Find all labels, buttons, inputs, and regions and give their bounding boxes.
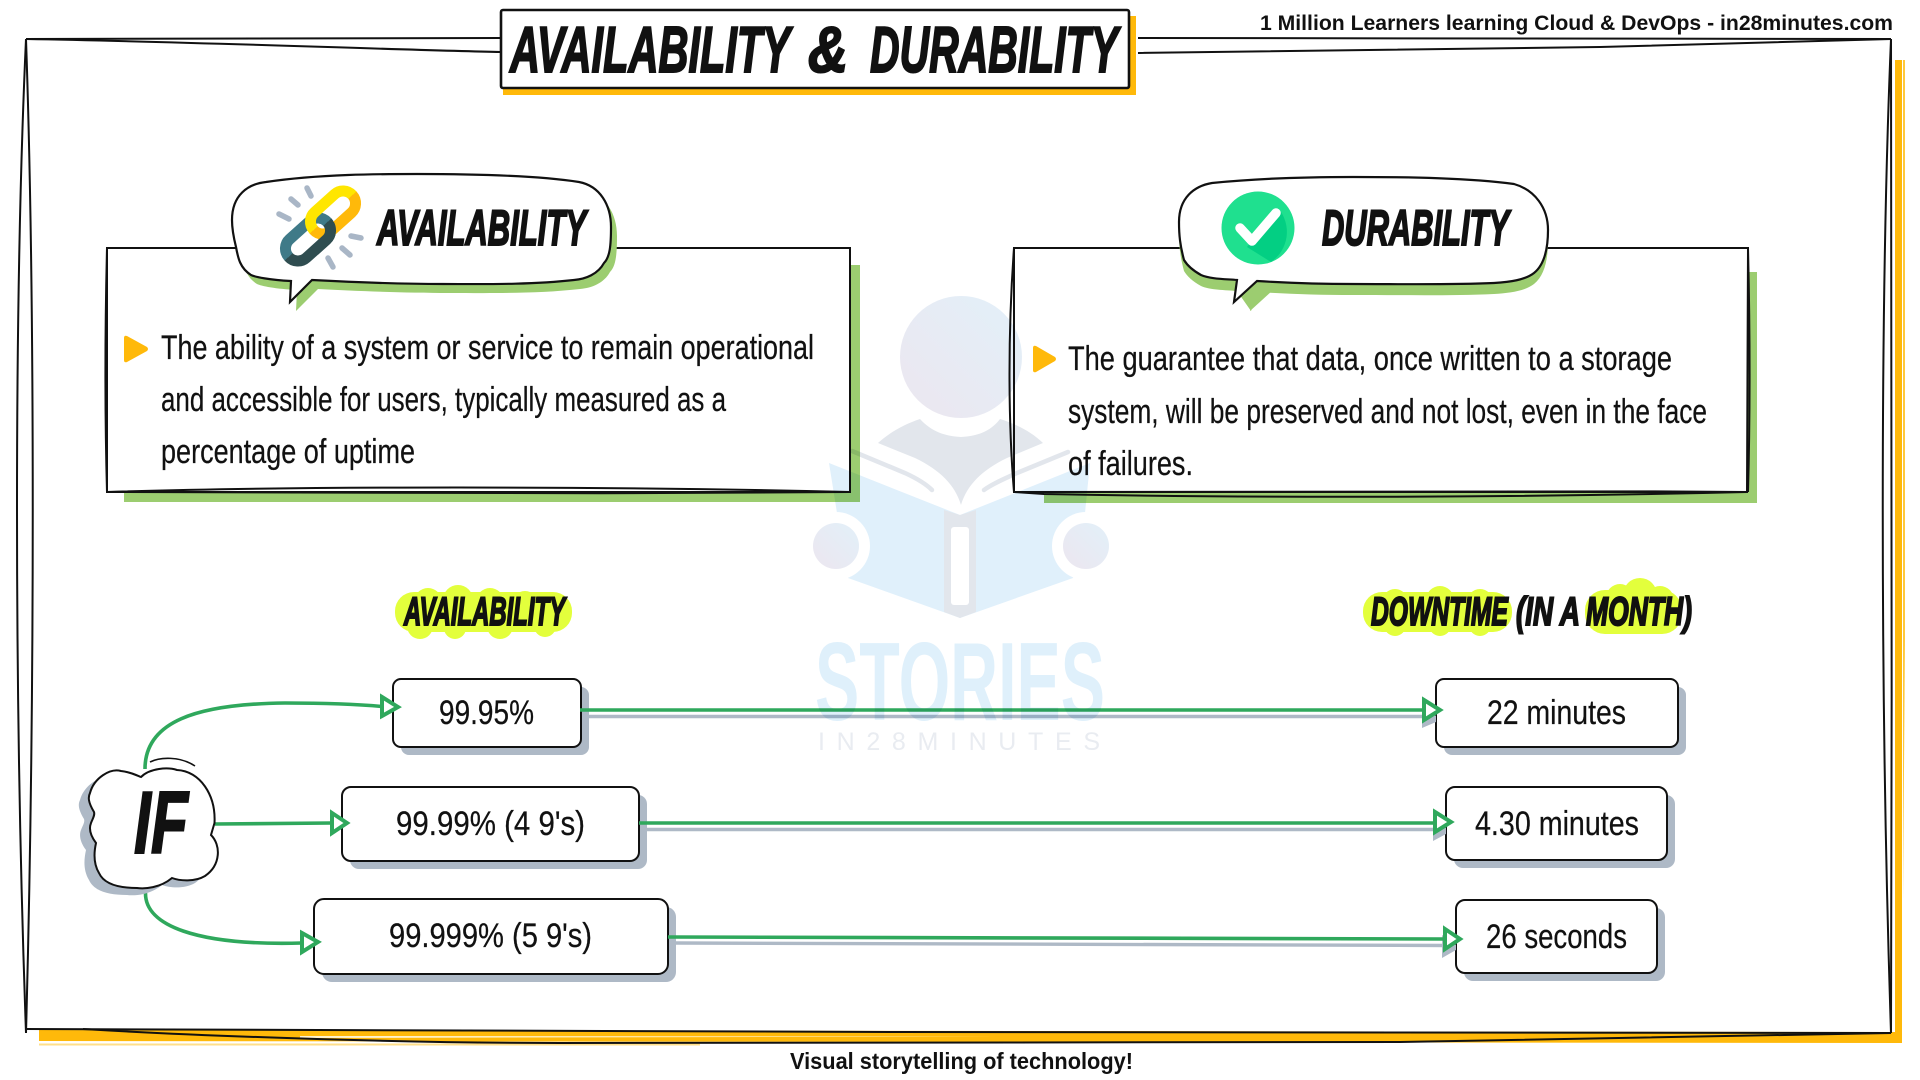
tagline: learners: 1 Million Learners learning Cloud & DevOps - in28minutes.com [1260, 11, 1893, 35]
row 1: 99.95% to 22 minutes: 99.95% [439, 694, 534, 732]
availability definition: The ability of a system or service to remain operational [161, 329, 814, 367]
bullet arrow [124, 336, 148, 362]
durability definition: The guarantee that data, once written to a storage [1068, 340, 1672, 378]
icon: broken chain link [279, 186, 361, 267]
column heading: availability: AVAILABILITY [403, 590, 567, 634]
heading: durability: DURABILITY [1322, 200, 1512, 256]
row 1: 99.95% to 22 minutes: 22 minutes [1487, 694, 1626, 732]
column heading: downtime: DOWNTIME [1371, 590, 1509, 634]
heading: availability: AVAILABILITY [376, 200, 589, 256]
row 3: 99.999% to 26 seconds: 26 seconds [1486, 918, 1627, 956]
column heading: downtime: (IN A [1516, 590, 1580, 634]
tagline: visual storytelling: Visual storytelling of technology! [790, 1048, 1133, 1074]
availability definition: percentage of uptime [161, 433, 415, 471]
availability definition [161, 329, 814, 471]
if cloud [79, 758, 218, 895]
watermark: stories in28minutes logo: STORIES [815, 620, 1105, 744]
watermark: stories in28minutes logo [802, 296, 1120, 756]
title banner: DURABILITY [870, 13, 1122, 86]
if cloud: IF [134, 773, 190, 872]
row 1: 99.95% to 22 minutes [393, 679, 1686, 755]
bullet arrow [1033, 346, 1056, 372]
arrow: if to 99.999% [145, 893, 318, 952]
availability definition: and accessible for users, typically measured as a [161, 381, 726, 419]
row 2: 99.99% to 4.30 minutes [342, 787, 1675, 869]
durability definition: system, will be preserved and not lost, even in the face [1068, 393, 1707, 431]
row 2: 99.99% to 4.30 minutes: 4.30 minutes [1475, 805, 1639, 843]
icon: green check [1222, 192, 1294, 264]
panel: durability [1010, 177, 1757, 503]
bubble: durability [1179, 177, 1548, 311]
column heading: availability [395, 585, 572, 639]
title banner: & [808, 13, 848, 86]
title banner [501, 10, 1136, 95]
row 2: 99.99% to 4.30 minutes: 99.99% (4 9's) [396, 805, 585, 843]
panel: availability [106, 174, 860, 502]
row 3: 99.999% to 26 seconds [314, 899, 1665, 982]
watermark: stories in28minutes logo: IN28MINUTES [818, 728, 1100, 756]
bubble: availability [232, 174, 617, 311]
column heading: downtime [1363, 578, 1692, 636]
durability definition [1068, 340, 1707, 483]
row 3: 99.999% to 26 seconds: 99.999% (5 9's) [389, 917, 592, 955]
title banner: AVAILABILITY [509, 13, 794, 86]
arrow: if to 99.99% [215, 813, 347, 833]
durability definition: of failures. [1068, 445, 1193, 483]
arrow: if to 99.95% [145, 697, 398, 769]
column heading: downtime: MONTH) [1586, 590, 1692, 634]
